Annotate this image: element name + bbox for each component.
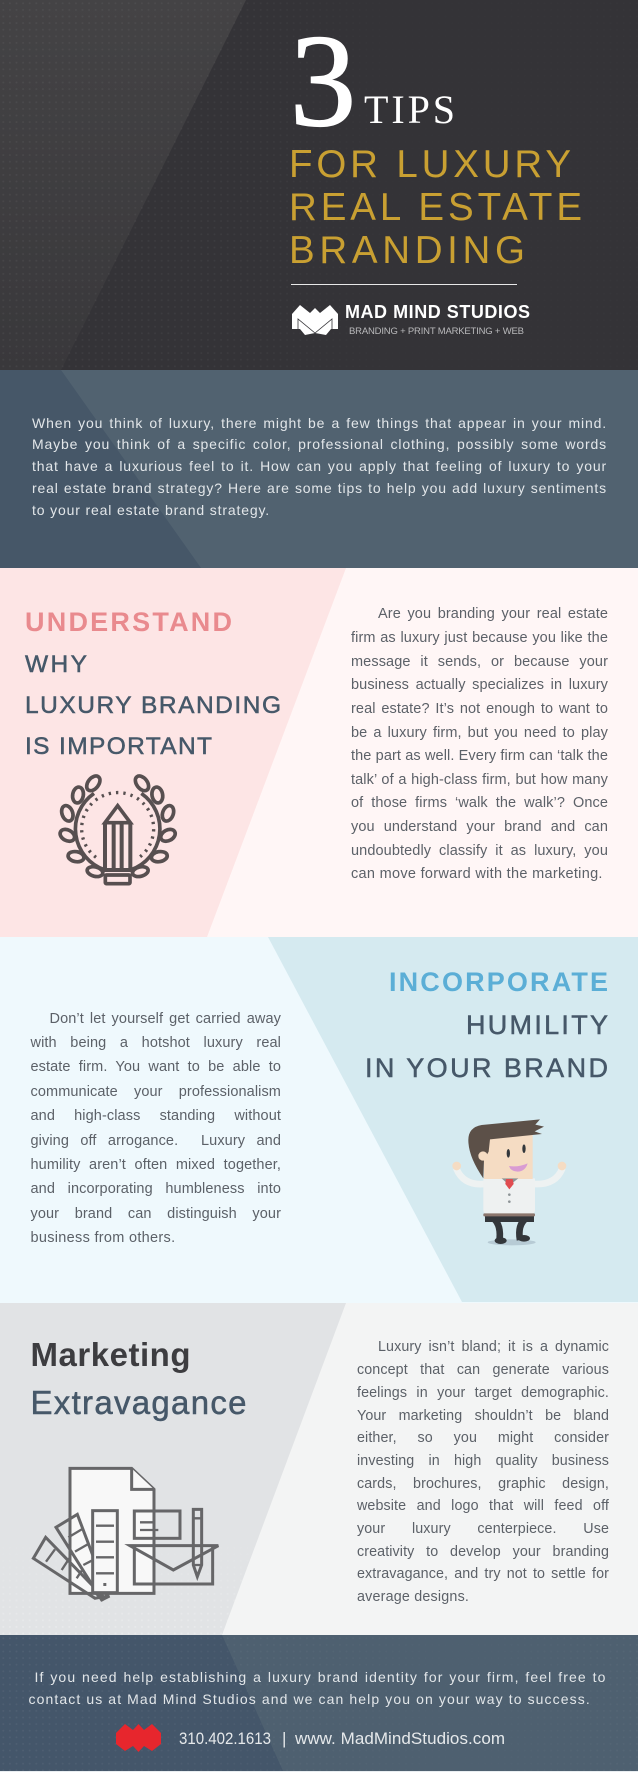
text: marketing body: feelings in your target demographic. (357, 1385, 609, 1401)
panel: marketing extravagance (0, 1303, 638, 1635)
text: marketing body: Luxury isn’t bland; it is a dynamic (378, 1339, 609, 1355)
panel: footer (0, 1635, 638, 1771)
text: footer call to action (28, 1668, 606, 1707)
text: humility body: business from others. (30, 1230, 175, 1246)
text: introduction (32, 414, 607, 518)
text: marketing body (357, 1339, 609, 1605)
logo: mad mind studios: MAD MIND STUDIOS (345, 302, 530, 322)
text: marketing body: either, so you might consider (357, 1430, 609, 1446)
text: humility body: communicate your professionalism (30, 1084, 281, 1100)
text: understand body: of those firms ‘walk the walk’? Once (351, 795, 608, 811)
text: footer call to action: contact us at Mad Mind Studios and we can help you on your way to success. (28, 1690, 591, 1706)
icon: happy businessman (452, 1119, 566, 1245)
text: marketing body: average designs. (357, 1589, 469, 1605)
heading: marketing extravagance (30, 1336, 246, 1421)
text: humility body: humility aren’t often mixed together, (30, 1157, 281, 1173)
title: for luxury real estate branding (289, 143, 582, 272)
text: humility body: and high-class standing without (30, 1108, 281, 1124)
text: marketing body: your luxury centerpiece. Use (357, 1521, 609, 1537)
text: marketing body: extravagance, and try not to settle for (357, 1566, 609, 1582)
text: understand body: you understand your brand and can (351, 819, 608, 835)
contact details: | (282, 1729, 286, 1748)
text: humility body (30, 1010, 281, 1246)
logo: mad mind studios (292, 302, 530, 337)
text: understand body: Are you branding your real estate (378, 606, 608, 622)
panel: introduction (0, 370, 638, 568)
title: 3 tips: TIPS (364, 87, 455, 132)
text: humility body: Don’t let yourself get carried away (50, 1010, 281, 1026)
text: humility body: with being a hotshot luxury real (30, 1035, 281, 1051)
text: marketing body: investing in high quality business (357, 1453, 609, 1469)
text: understand body: talk’ of a high-class firm, but how many (351, 772, 608, 788)
text: understand body: real estate? It’s not enough to want to (351, 701, 608, 717)
text: marketing body: Your marketing shouldn’t be bland (357, 1408, 609, 1424)
text: humility body: your brand can distinguish your (30, 1206, 281, 1222)
text: understand body (351, 606, 608, 882)
contact details: 310.402.1613 (179, 1729, 271, 1748)
heading: incorporate humility: HUMILITY (466, 1010, 608, 1040)
contact details (179, 1729, 505, 1748)
heading: incorporate humility: INCORPORATE (389, 967, 608, 997)
title: for luxury real estate branding: BRANDING (289, 229, 525, 272)
text: introduction: real estate brand strategy? Here are some tips to help you add luxury sentiments (32, 480, 607, 496)
text: humility body: estate firm. You want to be able to (30, 1059, 281, 1075)
logo: red mark (116, 1724, 161, 1752)
text: understand body: be a luxury firm, but you need to play (351, 724, 608, 740)
heading: marketing extravagance: Extravagance (30, 1384, 246, 1421)
logo: mad mind studios: BRANDING + PRINT MARKETING + WEB (349, 326, 524, 337)
panel: header (0, 0, 638, 370)
title: 3 tips: 3 (290, 7, 356, 154)
heading: understand: WHY (25, 651, 87, 678)
text: introduction: Maybe you think of a specific color, professional clothing, possibly some words (32, 436, 607, 452)
text: understand body: the part as well. Every firm can ‘talk the (351, 748, 608, 764)
text: understand body: message it sends, or because your (351, 654, 608, 670)
text: humility body: and incorporating humbleness into (30, 1181, 281, 1197)
heading: incorporate humility (365, 967, 608, 1083)
text: marketing body: website and logo that will feed off (357, 1498, 609, 1514)
text: introduction: When you think of luxury, there might be a few things that appear in your mind. (32, 414, 607, 430)
heading: understand: IS IMPORTANT (25, 733, 212, 760)
panel: understand why luxury branding is important (0, 568, 638, 937)
heading: incorporate humility: IN YOUR BRAND (365, 1053, 608, 1083)
heading: understand (25, 607, 281, 760)
text: marketing body: concept that can generate various (357, 1362, 609, 1378)
text: understand body: firm as luxury just because you like the (351, 630, 608, 646)
heading: understand: LUXURY BRANDING (25, 692, 281, 719)
text: marketing body: creativity to develop your branding (357, 1544, 609, 1560)
contact details: www. MadMindStudios.com (294, 1729, 505, 1748)
heading: understand: UNDERSTAND (25, 607, 232, 637)
icon: marketing collateral (33, 1468, 218, 1600)
panel: incorporate humility in your brand (0, 937, 638, 1303)
title: for luxury real estate branding: REAL ESTATE (289, 186, 582, 229)
text: understand body: can move forward with the marketing. (351, 866, 603, 882)
title: for luxury real estate branding: FOR LUXURY (289, 143, 571, 186)
text: humility body: giving off arrogance. Luxury and (30, 1133, 281, 1149)
text: marketing body: cards, brochures, graphic design, (357, 1476, 609, 1492)
title: 3 tips (290, 7, 455, 154)
text: understand body: business actually specializes in luxury (351, 677, 608, 693)
text: footer call to action: If you need help establishing a luxury brand identity for your firm, feel free to (34, 1668, 606, 1684)
heading: marketing extravagance: Marketing (30, 1336, 190, 1373)
text: understand body: undoubtedly classify it as luxury, you (351, 843, 608, 859)
text: introduction: that have a luxurious feel to it. How can you apply that feeling of luxury to your (32, 458, 607, 474)
text: introduction: to your real estate brand strategy. (32, 502, 270, 518)
icon: pencil in laurel wreath (58, 773, 177, 884)
